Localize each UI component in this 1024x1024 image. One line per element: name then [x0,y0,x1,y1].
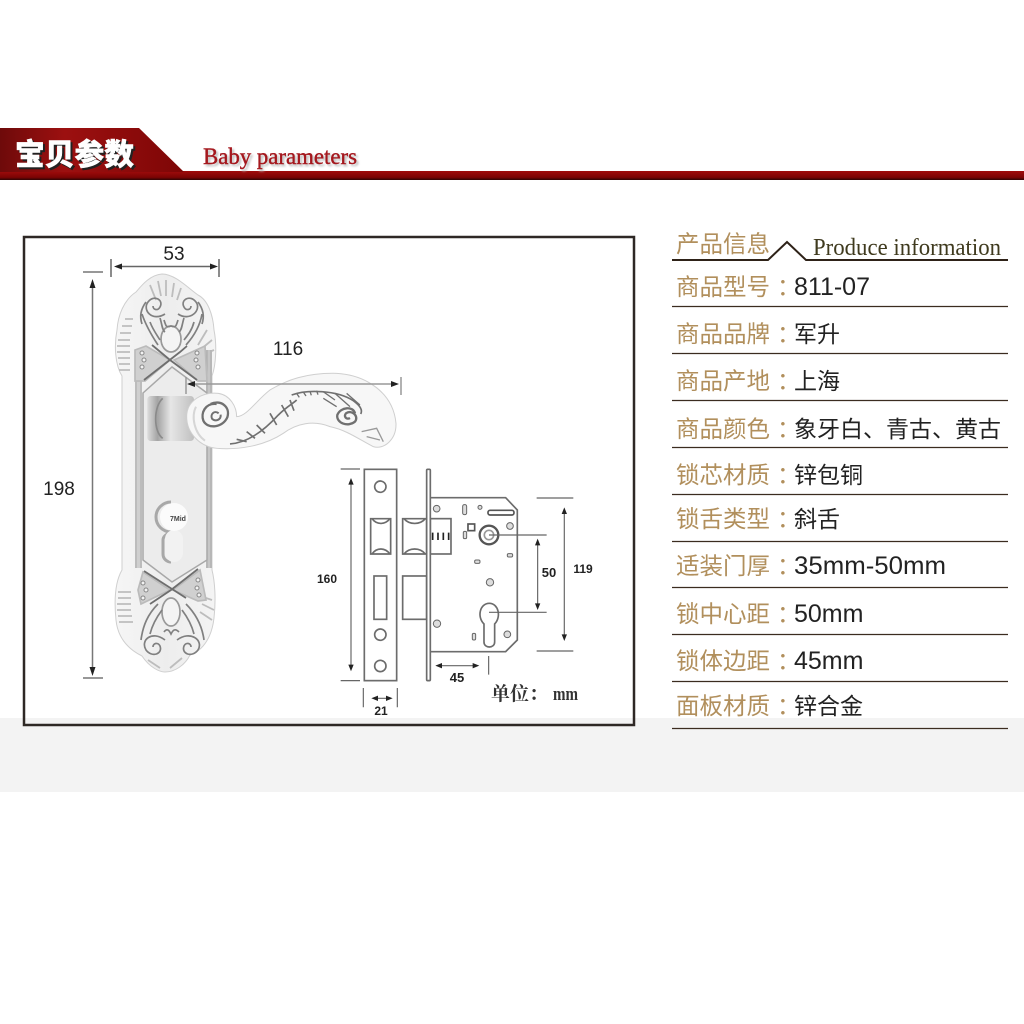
row: origin [676,362,840,396]
label 45: 45 [450,670,464,685]
row: backset: 锁体边距 [676,642,770,676]
lever neck [147,396,194,441]
row: backset: 45mm [794,647,863,675]
row: colors: 象牙白、青古、黄古 [794,410,1001,444]
strike plate [364,469,397,681]
row: center distance [676,595,863,629]
door handle lever [147,373,396,449]
row: brand: 军升 [794,315,840,349]
row: panel material: 锌合金 [794,687,863,721]
banner red bar [0,128,1024,180]
plate side ribs [117,280,214,668]
row: model [676,268,870,302]
lock case and faceplate [427,469,517,681]
row: backset: ： [777,642,800,676]
row: panel material: ： [777,687,800,721]
keyhole [156,502,188,562]
unit note: mm [553,684,578,705]
row: colors [676,410,1001,444]
row: brand: 商品品牌 [676,315,770,349]
row: panel material [676,687,863,721]
table heading [672,225,1008,261]
top rivets [140,351,200,369]
row: cylinder material: 锁芯材质 [676,456,770,490]
dimension lines [341,469,573,707]
panel: product information table [672,225,1008,728]
banner title: 宝贝参数 [15,130,134,174]
row: brand: ： [777,315,800,349]
deadbolt [403,576,427,619]
dimension: plate height 198: 198 [43,479,75,500]
row dividers [672,306,1008,728]
lock case internals [433,505,514,640]
dimension: lever length 116 [186,339,401,395]
row: latch type: 斜舌 [794,500,840,534]
row: colors: ： [777,410,800,444]
row: door thickness [676,547,946,581]
lever engraving [203,391,383,444]
row: cylinder material: 锌包铜 [794,456,863,490]
background band [0,718,1024,792]
row: cylinder material [676,456,863,490]
row: backset [676,642,863,676]
lock dimension labels [317,562,593,718]
panel: product diagram frame [24,237,634,725]
row: colors: 商品颜色 [676,410,770,444]
dimension: lever length 116: 116 [273,339,303,360]
table heading: 产品信息 [676,225,770,259]
dimension: plate width 53: 53 [163,244,185,265]
row: origin: 上海 [794,362,840,396]
keyhole: 7Mid [170,516,186,523]
row: latch type [676,500,840,534]
row: center distance: ： [777,595,800,629]
table heading: Produce information [813,235,1001,261]
dimension: plate width 53 [111,244,219,277]
row: brand [676,315,840,349]
row: model: 商品型号 [676,268,770,302]
row: origin: 商品产地 [676,362,770,396]
label 119: 119 [573,562,593,576]
lever body [187,373,396,449]
row: model: 811-07 [794,273,870,301]
latch bolt [403,519,451,554]
row: door thickness: 适装门厚 [676,547,770,581]
row: panel material: 面板材质 [676,687,770,721]
unit note: 单位： [491,679,548,706]
bottom ornament [138,569,206,654]
label 50: 50 [542,565,556,580]
door handle plate [115,274,216,672]
row: door thickness: 35mm-50mm [794,552,946,580]
cylinder keyhole [480,603,498,647]
central panel with stripes [135,350,142,568]
row: cylinder material: ： [777,456,800,490]
dimension: plate height 198 [43,272,103,678]
bottom rivets [141,578,201,600]
row: origin: ： [777,362,800,396]
label 21: 21 [374,704,388,718]
plate body [115,274,216,672]
row: model: ： [777,268,800,302]
top ornament [135,298,207,381]
mortise lock technical drawing [341,469,573,707]
dimension arrowheads [348,478,567,701]
banner subtitle: Baby parameters [203,144,357,169]
row: door thickness: ： [777,547,800,581]
row: center distance: 锁中心距 [676,595,770,629]
unit note [491,679,578,706]
row: center distance: 50mm [794,600,863,628]
label 160: 160 [317,572,337,586]
row: latch type: 锁舌类型 [676,500,770,534]
row: latch type: ： [777,500,800,534]
section header banner [0,128,1024,180]
